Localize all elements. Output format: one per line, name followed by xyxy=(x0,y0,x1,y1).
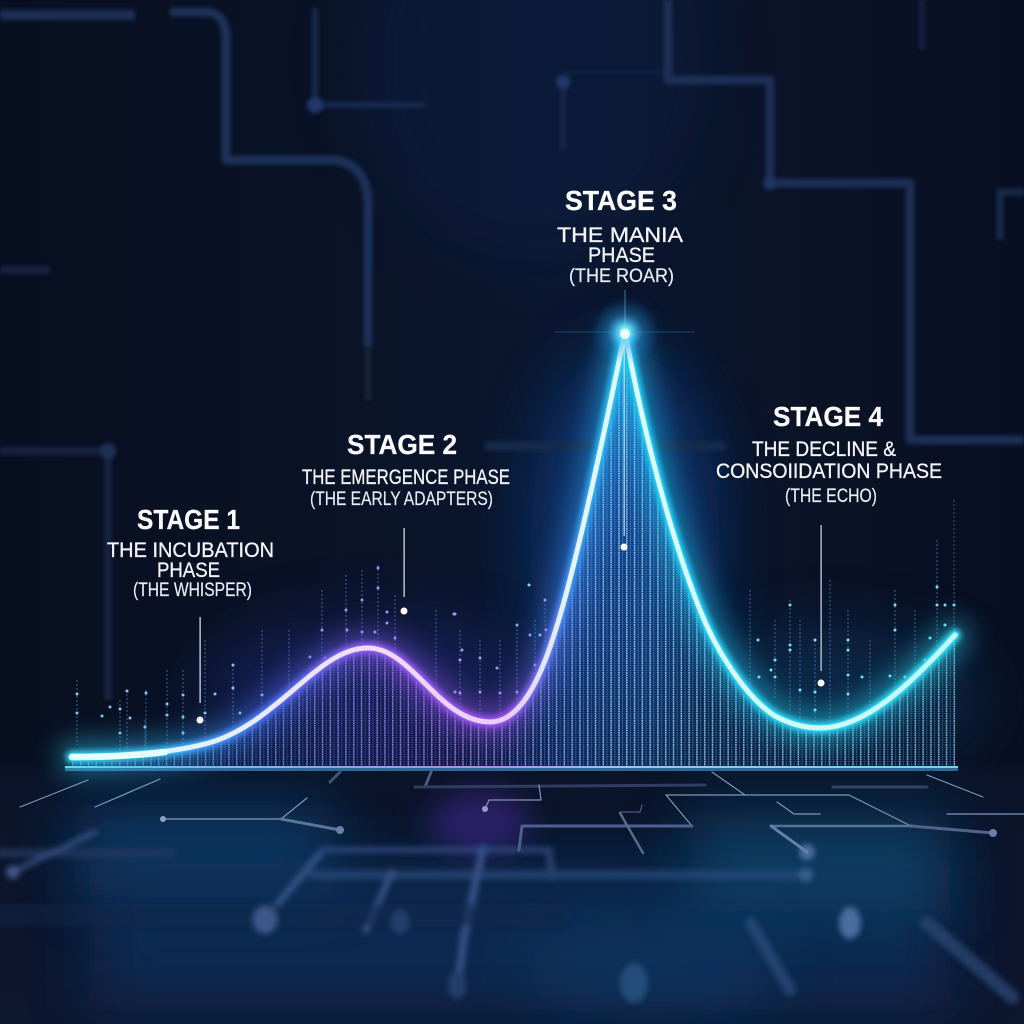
data particle dots xyxy=(77,568,954,733)
curve glow xyxy=(72,332,955,757)
floor panel xyxy=(0,760,1024,1024)
label: stage 3: THE MANIA xyxy=(557,224,683,247)
label: stage 1: PHASE xyxy=(157,559,220,582)
floor circuit traces, blurred xyxy=(0,832,1012,1003)
label: stage 2: (THE EARLY ADAPTERS) xyxy=(310,489,493,510)
label: stage 2 xyxy=(302,429,510,510)
data particle columns xyxy=(77,500,954,752)
label: stage 3: STAGE 3 xyxy=(565,185,677,216)
bar field under curve xyxy=(72,365,955,766)
stage 2 leader xyxy=(400,528,408,614)
stage 3 leader xyxy=(620,345,628,550)
label: stage 1: STAGE 1 xyxy=(137,504,240,535)
stage 1 leader xyxy=(196,617,204,724)
stage 4 leader xyxy=(818,525,824,686)
label: stage 3: PHASE xyxy=(588,244,655,267)
baseline xyxy=(65,766,958,771)
background circuit traces xyxy=(0,0,1024,700)
peak flare xyxy=(555,290,695,366)
label: stage 4: THE DECLINE & xyxy=(752,438,896,461)
label: stage 2: THE EMERGENCE PHASE xyxy=(302,466,510,489)
label: stage 4 xyxy=(716,401,942,507)
floor circuit traces, sharp xyxy=(20,772,1024,853)
chart: lifecycle curve xyxy=(60,290,960,771)
label: stage 4: STAGE 4 xyxy=(773,401,883,432)
label: stage 3: (THE ROAR) xyxy=(569,266,674,287)
label: stage 3 xyxy=(557,185,683,287)
label: stage 4: (THE ECHO) xyxy=(785,486,877,507)
label: stage 1: THE INCUBATION xyxy=(107,539,274,562)
label: stage 1 xyxy=(107,504,274,601)
label: stage 2: STAGE 2 xyxy=(347,429,457,460)
label: stage 1: (THE WHISPER) xyxy=(133,580,252,601)
label: stage 4: CONSOIIDATION PHASE xyxy=(716,460,942,483)
